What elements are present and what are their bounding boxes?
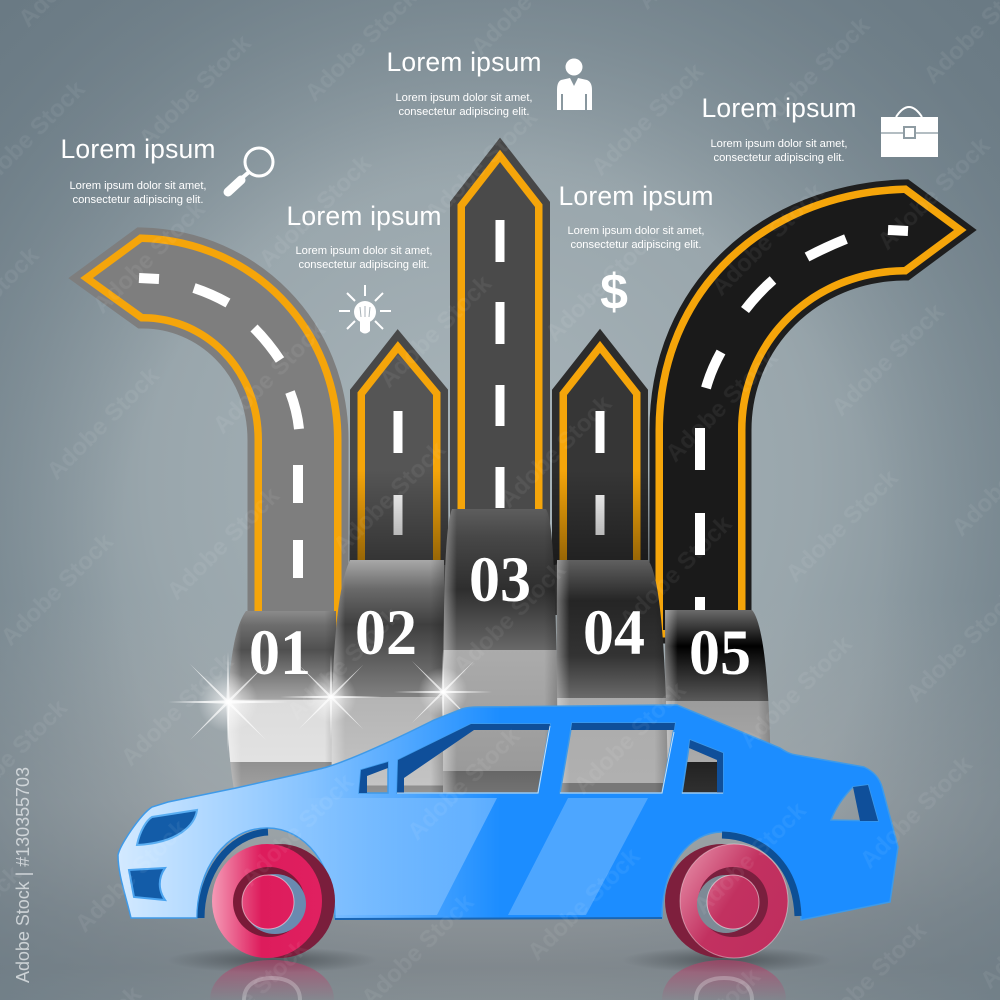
front wheel [212, 844, 335, 958]
number 04: 04 [583, 597, 645, 669]
body bottom edge [335, 918, 662, 919]
text block 2: Lorem ipsum [286, 201, 442, 231]
text block 5 [702, 93, 856, 164]
text block 4: Lorem ipsum dolor sit amet, [568, 225, 704, 237]
text block 5: Lorem ipsum [702, 93, 856, 123]
car body [118, 705, 898, 920]
number 03: 03 [469, 544, 531, 616]
text block 2: Lorem ipsum dolor sit amet, [296, 245, 432, 257]
band 04 [556, 560, 668, 810]
text block 5: Lorem ipsum dolor sit amet, [710, 138, 848, 150]
number 01: 01 [249, 617, 311, 689]
icon: businessman [557, 58, 592, 110]
text block 1: Lorem ipsum [60, 134, 216, 164]
band 03 [443, 509, 558, 810]
text block 1 [60, 134, 216, 206]
text block 2 [286, 201, 442, 271]
car: blue sedan [118, 705, 898, 920]
stock id vertical text: Adobe Stock | #130355703 [13, 767, 33, 983]
road 2: arrow [349, 353, 449, 600]
wheel arch shadows [201, 832, 798, 918]
text block 1: Lorem ipsum dolor sit amet, [70, 180, 206, 192]
text block 3: Lorem ipsum dolor sit amet, [396, 92, 532, 104]
step bands 01 to 05 [228, 509, 771, 810]
icon: light bulb [339, 285, 391, 334]
icon: magnifier [228, 148, 273, 192]
road 4: arrow [552, 353, 650, 600]
text block 4: Lorem ipsum [558, 181, 714, 211]
text block 3: consectetur adipiscing elit. [398, 106, 530, 118]
number 02: 02 [355, 597, 417, 669]
glass reflection stripes [300, 798, 648, 915]
fog light [129, 868, 165, 900]
headlight [137, 810, 197, 845]
text block 4: consectetur adipiscing elit. [570, 239, 702, 251]
text block 3 [386, 47, 542, 118]
wheel shadows and reflections [167, 947, 832, 1000]
band 05 [665, 610, 771, 810]
text block 4 [558, 181, 714, 251]
road 3: tall arrow [465, 162, 535, 540]
rear wheel [665, 844, 788, 958]
headlight flares [168, 651, 492, 752]
road 5: black curved arrow [663, 193, 954, 630]
text block 2: consectetur adipiscing elit. [298, 259, 430, 271]
road 1: grey curved arrow [93, 242, 334, 630]
band 02 [332, 560, 444, 810]
icon: briefcase [881, 107, 938, 157]
text block 3: Lorem ipsum [386, 47, 542, 77]
windows inner shadow [359, 723, 878, 821]
window light edges [397, 726, 723, 793]
text block 5: consectetur adipiscing elit. [714, 152, 844, 164]
band 01 [228, 611, 338, 810]
icon: dollar sign: $ [600, 264, 628, 320]
text block 1: consectetur adipiscing elit. [72, 194, 204, 206]
number 05: 05 [689, 617, 751, 689]
